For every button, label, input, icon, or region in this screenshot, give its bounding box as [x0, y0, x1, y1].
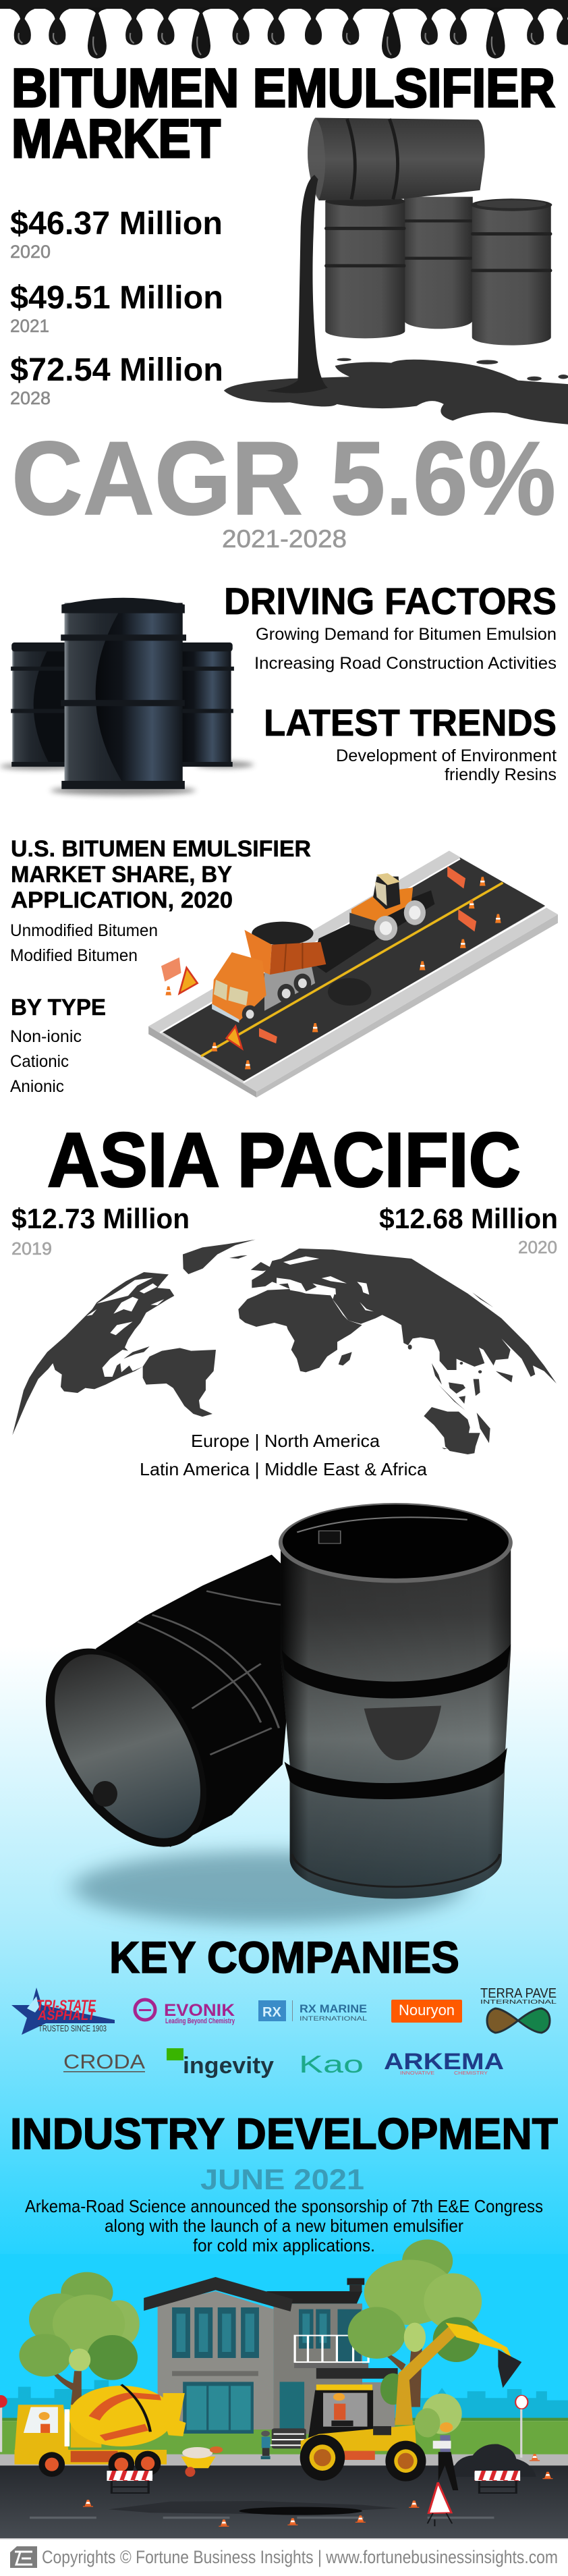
- title: [11, 58, 555, 169]
- right barrel: [471, 198, 552, 346]
- logo: RX Marine: RX: [262, 2005, 281, 2020]
- trend text: friendly Resins: [445, 765, 557, 784]
- other regions: Latin America | Middle East & Africa: [140, 1459, 428, 1479]
- development text: along with the launch of a new bitumen emulsifier: [105, 2216, 463, 2236]
- logo: Croda: CRODA: [63, 2051, 145, 2073]
- grass: [0, 2418, 568, 2455]
- Madagascar: [339, 1352, 352, 1365]
- value 2028: 2028: [10, 388, 51, 408]
- logo: RX Marine: INTERNATIONAL: [300, 2015, 367, 2022]
- logo: RX Marine: RX MARINE: [300, 2002, 367, 2015]
- page background gradient: [0, 1647, 568, 2274]
- heading: LATEST TRENDS: [264, 701, 557, 744]
- puddle: [224, 360, 568, 424]
- type list: Non-ionic: [10, 1027, 82, 1046]
- trend text: Development of Environment: [336, 746, 557, 765]
- lying barrel face: [13, 1631, 239, 1864]
- value 2019: [11, 1203, 190, 1259]
- floor shadow: [72, 1851, 463, 1924]
- bitumen pile: [328, 978, 371, 1006]
- type list: Cationic: [10, 1052, 69, 1071]
- standing barrel body: [281, 1543, 511, 1899]
- value 2019: 2019: [11, 1238, 52, 1259]
- barrel shadows: [0, 761, 254, 795]
- key companies heading: KEY COMPANIES: [109, 1932, 459, 1982]
- Sri Lanka: [408, 1344, 412, 1350]
- illustration: pouring barrels and bitumen puddle: [224, 118, 568, 424]
- road lines: [160, 858, 546, 1083]
- logo: Arkema: INNOVATIVE: [400, 2071, 434, 2076]
- world map: western hemisphere: [12, 1240, 256, 1435]
- logo: Tri-State Asphalt: TRI-STATE: [36, 1997, 96, 2014]
- logo: Terra Pave: INTERNATIONAL: [480, 1999, 557, 2005]
- road slab: [148, 851, 558, 1097]
- logo: Tri-State Asphalt: [11, 1988, 115, 2035]
- value 2028: $72.54 Million: [10, 352, 223, 388]
- left barrel: [324, 196, 405, 338]
- illustration: road construction scene: [0, 2239, 568, 2539]
- South America: [143, 1348, 216, 1417]
- UK: [251, 1262, 273, 1271]
- sidewalk: [0, 2455, 568, 2465]
- header: dripping bitumen: [0, 0, 568, 59]
- New Zealand strip: [477, 1413, 490, 1443]
- logo: Evonik: EVONIK: [164, 2001, 235, 2020]
- barricades and cones: [161, 867, 501, 1069]
- logo: Terra Pave: [480, 1986, 557, 2033]
- middle barrel: [404, 197, 473, 329]
- driving factors: [224, 580, 557, 673]
- cement mixer truck: [14, 2384, 186, 2477]
- development text: [25, 2196, 543, 2255]
- footer: [0, 2538, 568, 2576]
- factor 1: Growing Demand for Bitumen Emulsion: [256, 625, 557, 644]
- asphalt road: [0, 2465, 568, 2539]
- value 2020: 2020: [10, 242, 51, 262]
- value 2028: [10, 352, 223, 408]
- industry development: [10, 2109, 558, 2255]
- value 2020: $12.68 Million: [379, 1203, 558, 1234]
- application list: Modified Bitumen: [10, 946, 138, 965]
- left tree: [19, 2272, 140, 2407]
- North America: [12, 1272, 174, 1435]
- application list: [10, 921, 158, 965]
- dump truck: [212, 922, 326, 1023]
- heading: MARKET SHARE, BY: [11, 862, 232, 887]
- left back barrel: [11, 642, 70, 767]
- Hudson Bay and Arctic channels: [86, 1278, 164, 1335]
- puddle droplets: [337, 358, 568, 381]
- world map: eastern hemisphere: [229, 1249, 557, 1454]
- Africa: [238, 1289, 362, 1372]
- date: JUNE 2021: [200, 2164, 364, 2196]
- Tasmania: [442, 1448, 447, 1449]
- value 2020: [379, 1203, 558, 1257]
- reflection: [364, 1705, 441, 1760]
- heading: APPLICATION, 2020: [11, 887, 233, 913]
- market value figures: [10, 206, 223, 408]
- pipes stack: [270, 2428, 306, 2448]
- other regions: Europe | North America: [191, 1431, 380, 1451]
- heading: [11, 836, 311, 913]
- value 2021: $49.51 Million: [10, 280, 223, 316]
- company logos: [11, 1986, 557, 2079]
- value 2020: [10, 206, 223, 262]
- logo: Fortune Business Insights: [10, 2546, 37, 2568]
- CAGR period: 2021-2028: [222, 525, 347, 553]
- lying barrel highlights: [138, 1591, 283, 1755]
- application segment: [10, 836, 311, 965]
- Eurasia: [252, 1249, 557, 1383]
- standing barrel hoops: [282, 1644, 511, 1799]
- logo: Evonik: Leading Beyond Chemistry: [165, 2017, 235, 2025]
- value 2020: 2020: [518, 1237, 557, 1257]
- logo: Arkema: CHEMISTRY: [454, 2071, 488, 2076]
- right back barrel: [177, 642, 234, 767]
- tilted barrel: [308, 118, 485, 200]
- logo: Nouryon: [391, 2000, 462, 2023]
- value 2021: [10, 280, 223, 336]
- logo: Ingevity: ingevity: [183, 2053, 274, 2079]
- title: MARKET: [11, 109, 221, 169]
- value 2020: $46.37 Million: [10, 206, 223, 242]
- logo: Arkema: ARKEMA: [384, 2049, 504, 2075]
- excavator: [300, 2323, 521, 2482]
- logo: Ingevity: [167, 2048, 274, 2079]
- crack and pothole: [30, 2501, 494, 2519]
- Greenland: [183, 1240, 256, 1274]
- sky fill behind scene: [0, 2254, 568, 2416]
- logo: Tri-State Asphalt: TRUSTED SINCE 1903: [38, 2023, 107, 2033]
- logo: RX Marine: [258, 2000, 367, 2022]
- regional values: [11, 1203, 558, 1259]
- fresh bitumen patch: [312, 890, 434, 973]
- development text: for cold mix applications.: [193, 2235, 375, 2255]
- bitumen heap: [453, 2444, 536, 2477]
- type list: [10, 1027, 82, 1096]
- Japan: [496, 1371, 513, 1382]
- pouring stream: [266, 175, 328, 393]
- application list: Unmodified Bitumen: [10, 921, 158, 940]
- road signs: [0, 2395, 528, 2458]
- other regions: [140, 1431, 428, 1479]
- female engineer: [433, 2422, 458, 2490]
- Asia Pacific heading: ASIA PACIFIC: [47, 1118, 521, 1203]
- illustration: three dark barrels: [0, 598, 254, 795]
- heading: U.S. BITUMEN EMULSIFIER: [11, 836, 311, 862]
- value 2019: $12.73 Million: [11, 1203, 190, 1234]
- Australia: [424, 1407, 480, 1454]
- traffic cones: [83, 2454, 552, 2527]
- latest trends: [264, 701, 557, 784]
- logo: Tri-State Asphalt: ASPHALT: [37, 2008, 96, 2023]
- Kuril arc: [472, 1292, 494, 1307]
- Iceland: [229, 1255, 248, 1259]
- heading: DRIVING FACTORS: [224, 580, 557, 622]
- Southeast Asia islands: [432, 1362, 482, 1410]
- right tree: [348, 2239, 482, 2438]
- logo: Kao: Kao: [299, 2050, 364, 2078]
- type segment: [10, 995, 106, 1096]
- heading: BY TYPE: [11, 995, 106, 1020]
- asphalt: [161, 858, 545, 1081]
- barrel top: [279, 1503, 513, 1583]
- heading: INDUSTRY DEVELOPMENT: [10, 2109, 558, 2158]
- house: [144, 2277, 398, 2434]
- city skyline: [0, 2380, 568, 2418]
- illustration: large glossy barrels: [13, 1503, 513, 1924]
- trend text: [336, 746, 557, 784]
- logo: Evonik: [135, 2000, 235, 2025]
- warning sign: [428, 2482, 452, 2526]
- road roller: [349, 873, 426, 941]
- front barrel: [61, 598, 186, 789]
- barriers: [107, 2471, 520, 2493]
- type list: Anionic: [10, 1077, 64, 1096]
- value 2021: 2021: [10, 316, 49, 336]
- logo: Terra Pave: TERRA PAVE: [480, 1986, 557, 2001]
- illustration: isometric road with trucks: [148, 851, 558, 1097]
- inland seas: [277, 1257, 374, 1321]
- Caribbean: [123, 1346, 150, 1359]
- lying barrel body: [94, 1555, 290, 1847]
- logo: Nouryon: Nouryon: [399, 2002, 455, 2019]
- wheelbarrow: [181, 2446, 223, 2477]
- factor 2: Increasing Road Construction Activities: [254, 654, 557, 673]
- boy: [261, 2431, 271, 2459]
